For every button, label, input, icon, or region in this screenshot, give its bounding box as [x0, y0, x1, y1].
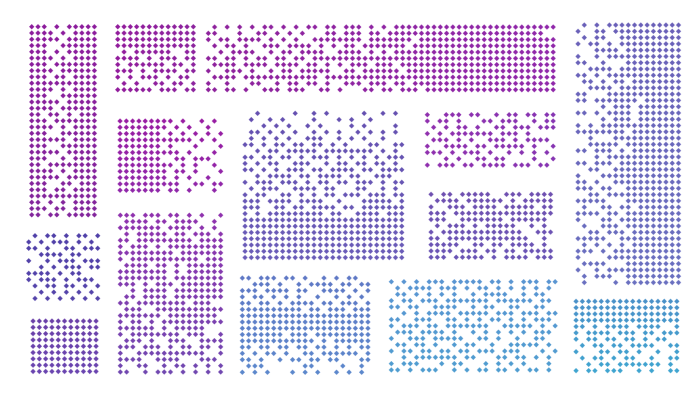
panel: bottom-centre blue dot block: [239, 275, 371, 375]
panel: long top purple dot band: [205, 24, 556, 93]
panel: lower-left purple dot block: [117, 212, 224, 375]
panel: bottom sky-blue scattered dot block: [388, 279, 558, 373]
panel: mid-right violet dot band: [428, 191, 554, 260]
panel: upper-right sparse purple dot band: [424, 112, 556, 168]
panel: tall left magenta dot column: [29, 24, 98, 218]
panel: magenta dot block fading right: [117, 118, 224, 193]
panel: small sparse indigo dot block: [26, 233, 101, 302]
panel: top-left magenta dot block: [115, 24, 196, 93]
panel: tall right periwinkle dot column: [575, 22, 682, 286]
panel: small solid violet dot grid: [30, 318, 99, 375]
panel: central violet dot block, dense at bottom: [242, 110, 405, 261]
panel: bottom-right cyan dot block: [573, 298, 680, 374]
